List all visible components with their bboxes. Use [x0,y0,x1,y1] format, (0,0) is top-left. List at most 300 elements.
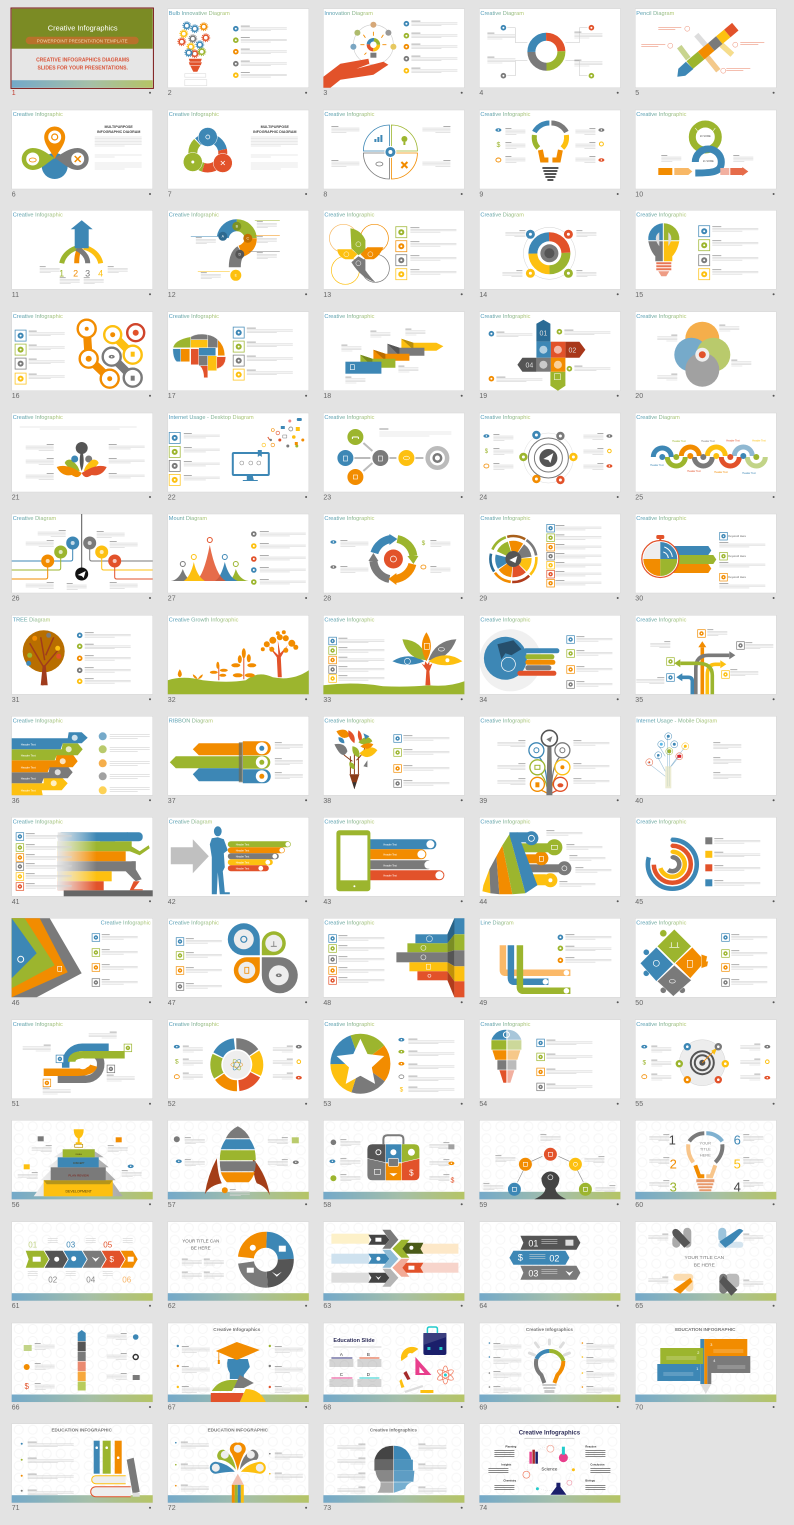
slide 7: multipurpose ring [168,110,309,198]
slide 42: businessman bands: Header Text [236,855,250,858]
slide 28: arrow cycle: 28 [323,596,331,602]
slide 10: figure eight arrows [635,110,776,198]
slide 55: target: Creative Infographic [636,1022,687,1028]
slide 49: line diagram: 49 [479,1000,487,1007]
slide 33: leaves infographic [323,615,464,704]
slide 30: stopwatch [635,514,776,602]
slide 20: venn: 20 [635,393,643,400]
slide 52: six-part ring: $ [175,1059,179,1066]
slide 44: fan stripes: Creative Infographic [480,819,531,825]
slide 68: education slide [323,1323,464,1412]
slide 45: concentric arcs: Creative Infographic [636,819,687,825]
slide 12: question mark: Creative Infographic [169,213,219,219]
slide 47: four teardrops [168,918,309,1007]
slide 48: 3d bars: Creative Infographic [324,920,375,926]
slide 62: title and ring arrows: 62 [168,1303,176,1310]
slide 70: education panels: EDUCATION INFOGRAPHIC [675,1327,736,1332]
slide 61: chevron steps: 04 [86,1276,96,1285]
slide 2: bulb innovative diagram: 2 [168,90,172,97]
slide 16: connected rings [12,312,153,400]
slide 11: arrow merge 1234: 1 [59,268,64,278]
slide 43: phone bands: Header Text [383,864,397,867]
slide 64: ribbon stack: $ [518,1253,523,1263]
slide 9: bulb with side icons [479,110,620,198]
slide 22: internet usage desktop [168,413,309,502]
slide 61: chevron steps: 03 [66,1241,76,1250]
slide 38: pencil tree: 38 [323,798,331,805]
slide 66: hexagon column: $ [24,1382,29,1391]
slide 22: internet usage desktop: Internet Usage - Desktop Diagram [169,415,254,421]
slide 18: stepped bands: Creative Infographic [324,314,375,320]
slide 61: chevron steps: 05 [103,1241,113,1250]
slide 32: growth infographic: 32 [168,697,176,704]
slide 64: ribbon stack: 01 [528,1239,538,1249]
slide 25: wave: Header Text [752,440,766,442]
slide 45: concentric arcs: 45 [635,899,643,906]
slide 61: chevron steps: 02 [48,1276,58,1285]
slide 56: stairs and trophy [12,1120,153,1209]
slide 12: question mark: A [222,235,225,239]
slide 6: multipurpose infographic: 6 [12,192,16,198]
slide 26: subway lines [12,514,153,602]
slide 72: pencil petals [168,1424,309,1512]
slide 39: pin tree: 39 [479,798,487,805]
slide 1: title slide: Creative Infographics [48,24,118,33]
slide 74: science: Creative Infographics [519,1431,581,1437]
slide 21: plant pins [12,413,153,502]
slide 36: stacked arrow bands: 36 [12,798,20,805]
slide 73: head profile: 73 [323,1505,331,1512]
slide 65: corner arrows with title: 65 [635,1303,643,1310]
slide 16: connected rings: 16 [12,393,20,400]
slide 40: internet usage mobile: 40 [635,798,643,805]
slide 25: wave: Header Text [742,472,756,475]
slide 2: bulb innovative diagram [168,9,309,97]
slide 5: pencil diagram: 5 [635,90,639,97]
slide 5: pencil diagram [635,9,776,97]
slide 30: stopwatch: Keyword Here [728,534,746,538]
slide 26: subway lines: Creative Diagram [13,516,57,522]
slide 62: title and ring arrows [168,1222,309,1310]
slide 6: multipurpose infographic: INFOGRAPHIC DIAGRAM [97,130,140,134]
slide 29: wheel: 29 [479,596,487,602]
slide 29: wheel [479,514,620,602]
slide 43: phone bands [323,817,464,906]
slide 72: pencil petals: 72 [168,1505,176,1512]
slide 25: wave [635,413,776,502]
slide 10: figure eight arrows: 21 SOME [703,160,714,163]
slide 42: businessman bands: Creative Diagram [169,819,213,825]
slide 36: stacked arrow bands: Creative Infographic [13,718,63,724]
slide 36: stacked arrow bands: Header Text [21,765,36,769]
slide 68: education slide: D [367,1372,371,1377]
slide 58: briefcase [323,1120,464,1209]
slide 2: bulb innovative diagram: Bulb Innovative Diagram [169,11,230,17]
slide 65: corner arrows with title: BE HERE [694,1263,715,1269]
slide 30: stopwatch: Keyword Here [728,554,746,558]
slide 27: mountain diagram [168,514,309,602]
slide 34: globe bands: 34 [479,697,487,704]
slide 58: briefcase: 58 [323,1202,331,1209]
slide 32: growth infographic: Creative Growth Infographic [169,617,239,623]
slide 57: rocket [168,1120,309,1209]
slide 73: head profile: Creative Infographics [370,1428,417,1433]
slide 47: four teardrops: 47 [168,1000,176,1007]
slide 15: bulb quadrants: 15 [635,292,643,299]
slide 11: arrow merge 1234 [12,210,153,299]
slide 22: internet usage desktop: 22 [168,494,176,502]
slide 7: multipurpose ring: Creative Infographic [169,112,219,118]
slide 17: brain: Creative Infographic [169,314,219,320]
slide 14: puzzle ring diagram [479,210,620,299]
slide 64: ribbon stack [479,1222,620,1310]
slide 56: stairs and trophy: PLAN REVIEW [68,1173,89,1177]
slide 19: cross arrows [479,312,620,400]
slide 12: question mark: D [239,253,242,257]
slide 1: title slide: CREATIVE INFOGRAPHICS DIAGRAMS [36,58,130,64]
slide 68: education slide: C [340,1372,344,1377]
slide 6: multipurpose infographic: Creative Infographic [13,112,63,118]
slide 31: tree diagram: 31 [12,697,20,704]
slide 6: multipurpose infographic: MULTIPURPOSE [105,125,133,129]
slide 7: multipurpose ring: 7 [168,192,172,198]
slide 69: bulb with rays: 69 [479,1404,487,1412]
slide 43: phone bands: Creative Infographic [324,819,375,825]
slide 30: stopwatch: Creative Infographic [636,516,687,522]
slide 53: star ring: $ [400,1087,404,1094]
slide 68: education slide: Education Slide [333,1338,375,1344]
slide 33: leaves infographic: Creative Infographic [324,617,375,623]
slide 19: cross arrows: 02 [569,348,576,355]
slide 16: connected rings: Creative Infographic [13,314,63,320]
slide 33: leaves infographic: 33 [323,697,331,704]
slide 32: growth infographic [168,615,309,704]
slide 39: pin tree [479,716,620,805]
slide 13: clover: Creative Infographic [324,213,375,219]
slide 67: graduate: Creative Infographics [213,1327,261,1332]
slide 34: globe bands [479,615,620,704]
slide 15: bulb quadrants: Creative Infographic [636,213,687,219]
slide 3: innovation diagram: Innovation Diagram [324,11,373,17]
slide 74: science: Chemistry [503,1479,517,1483]
slide 12: question mark: C [247,237,250,241]
slide 37: ribbon diagram: 37 [168,798,176,805]
slide 68: education slide: A [340,1352,343,1357]
slide 12: question mark: E [235,274,238,278]
slide 60: numbered bulb: TITLE [700,1146,711,1151]
slide 50: puzzle [635,918,776,1007]
slide 74: science: Planning [505,1445,517,1449]
slide 28: arrow cycle [323,514,464,602]
slide 53: star ring: 53 [323,1101,331,1108]
slide 19: cross arrows: Creative Infographic [480,314,531,320]
slide 46: chevron corner [12,918,153,1007]
slide 20: venn: Creative Infographic [636,314,687,320]
slide 25: wave: Creative Diagram [636,415,680,421]
slide 70: education panels: 1 [696,1367,698,1371]
slide 48: 3d bars [323,918,464,1007]
slide 71: books: EDUCATION INFOGRAPHIC [51,1428,113,1433]
slide 70: education panels [635,1323,776,1412]
slide 19: cross arrows: 19 [479,393,487,400]
slide 4: creative diagram ring: Creative Diagram [480,11,524,17]
slide 28: arrow cycle: Creative Infographic [324,516,375,522]
slide 74: science: Reaction [585,1445,597,1449]
slide 30: stopwatch: Keyword Here [728,575,746,579]
slide 42: businessman bands: 42 [168,899,176,906]
slide 36: stacked arrow bands [12,716,153,805]
slide 23: flow circles: Creative Infographic [324,415,375,421]
slide 12: question mark: B [236,225,239,229]
slide 43: phone bands: Header Text [383,843,397,846]
slide 38: pencil tree [323,716,464,805]
slide 8: quadrant circle: Creative Infographic [324,112,375,118]
slide 60: numbered bulb: 4 [734,1179,741,1194]
slide 34: globe bands: Creative Infographic [480,617,531,623]
slide 25: wave: Header Text [687,470,701,473]
slide 69: bulb with rays [479,1323,620,1412]
slide 68: education slide: 68 [323,1404,331,1412]
slide 67: graduate [168,1323,309,1412]
slide 52: six-part ring [168,1020,309,1108]
slide 43: phone bands: Header Text [383,853,397,856]
slide 66: hexagon column: 66 [12,1404,20,1412]
slide 1: title slide: SLIDES FOR YOUR PRESENTATIONS. [38,66,128,72]
slide 39: pin tree: Creative Infographic [480,718,531,724]
slide 18: stepped bands [323,312,464,400]
slide 12: question mark: 12 [168,292,176,299]
slide 74: science: Biology [585,1479,595,1483]
slide 74: science: 74 [479,1505,487,1512]
slide 56: stairs and trophy: IDEAS [75,1153,83,1156]
slide 59: head with network: 59 [479,1202,487,1209]
slide 23: flow circles: 23 [323,494,331,502]
slide 66: hexagon column [12,1323,153,1412]
slide 10: figure eight arrows: 10 [635,192,643,198]
slide 40: internet usage mobile [635,716,776,805]
slide 70: education panels: 70 [635,1404,643,1412]
slide 21: plant pins: 21 [12,494,20,502]
slide 59: head with network [479,1120,620,1209]
slide 42: businessman bands: Header Text [236,867,250,870]
slide 62: title and ring arrows: BE HERE [191,1246,211,1251]
slide 4: creative diagram ring [479,9,620,97]
slide 3: innovation diagram: 3 [323,90,327,97]
slide 57: rocket: 57 [168,1202,176,1209]
slide 40: internet usage mobile: Internet Usage - Mobile Diagram [636,718,717,724]
slide 71: books [12,1424,153,1512]
slide 13: clover [323,210,464,299]
slide 52: six-part ring: 52 [168,1101,176,1108]
slide 46: chevron corner: Creative Infographic [101,920,151,926]
slide 61: chevron steps [12,1222,153,1310]
slide 20: venn [635,312,776,400]
slide 26: subway lines: 26 [12,596,20,602]
slide 36: stacked arrow bands: Header Text [21,776,36,780]
slide 11: arrow merge 1234: 3 [85,268,90,278]
slide 27: mountain diagram: Mount Diagram [169,516,207,522]
slide 41: runner [12,817,153,906]
slide 35: road arrows: Creative Infographic [636,617,687,623]
slide 10: figure eight arrows: Creative Infographic [636,112,687,118]
slide 28: arrow cycle: $ [422,540,426,547]
slide 53: star ring [323,1020,464,1108]
slide 60: numbered bulb: 5 [734,1156,741,1171]
slide 70: education panels: 3 [710,1343,712,1347]
slide 1: title slide: POWERPOINT PRESENTATION TEMPLATE [37,38,128,43]
slide 25: wave: Header Text [701,440,715,443]
slide 55: target: $ [642,1060,646,1067]
slide 11: arrow merge 1234: 4 [98,268,103,278]
slide 35: road arrows: 35 [635,697,643,704]
slide 74: science: Science [541,1467,558,1472]
slide 9: bulb with side icons: Creative Infographic [480,112,531,118]
slide 35: road arrows [635,615,776,704]
slide 19: cross arrows: 04 [526,363,533,370]
slide 11: arrow merge 1234: Creative Infographic [13,213,63,219]
slide 21: plant pins: Creative Infographic [13,415,63,421]
slide 64: ribbon stack: 64 [479,1303,487,1310]
slide 30: stopwatch: 30 [635,596,643,602]
slide 44: fan stripes [479,817,620,906]
slide 1: title slide: 1 [12,90,16,97]
slide 67: graduate: 67 [168,1404,176,1412]
slide 71: books: 71 [12,1505,20,1512]
slide 55: target: 55 [635,1101,643,1108]
slide 47: four teardrops: Creative Infographic [169,920,219,926]
slide 54: striped bulb [479,1020,620,1108]
slide 37: ribbon diagram: RIBBON Diagram [169,718,213,724]
slide 6: multipurpose infographic [12,110,153,198]
slide 43: phone bands: Header Text [383,874,397,877]
slide 17: brain [168,312,309,400]
slide 24: paper plane radial: 24 [479,494,487,502]
slide 53: star ring: Creative Infographic [324,1022,375,1028]
slide 3: innovation diagram [323,9,464,97]
slide 25: wave: Header Text [650,464,664,467]
slide 61: chevron steps: 61 [12,1303,20,1310]
slide 42: businessman bands: Header Text [236,849,250,852]
slide 69: bulb with rays: Creative Infographics [526,1327,573,1332]
slide 27: mountain diagram: 27 [168,596,176,602]
slide 24: paper plane radial: $ [485,449,489,455]
slide 56: stairs and trophy: DEVELOPMENT [65,1189,93,1193]
slide 1: title slide [11,8,153,97]
slide 49: line diagram: Line Diagram [480,920,514,926]
slide 11: arrow merge 1234: 2 [73,268,78,278]
slide 15: bulb quadrants [635,210,776,299]
slide 55: target [635,1020,776,1108]
slide 5: pencil diagram: Pencil Diagram [636,11,675,17]
slide 54: striped bulb: Creative Infographic [480,1022,531,1028]
slide 58: briefcase: $ [409,1168,414,1177]
slide 36: stacked arrow bands: Header Text [21,742,36,746]
slide 37: ribbon diagram [168,716,309,805]
slide 62: title and ring arrows: YOUR TITLE CAN [182,1239,219,1244]
slide 7: multipurpose ring: MULTIPURPOSE [261,125,290,129]
slide 73: head profile [323,1424,464,1512]
slide 74: science: Conclusion [590,1463,605,1467]
slide 51: interlocked bands: 51 [12,1101,20,1108]
slide 25: wave: Header Text [726,440,740,442]
slide 68: education slide: B [367,1352,370,1357]
slide 13: clover: 13 [323,292,331,299]
slide 42: businessman bands: Header Text [236,843,250,846]
slide 43: phone bands: 43 [323,899,331,906]
slide 17: brain: 17 [168,393,176,400]
slide 63: arrow rows: 63 [323,1303,331,1310]
slide 61: chevron steps: 06 [122,1276,132,1285]
slide 44: fan stripes: 44 [479,899,487,906]
slide 60: numbered bulb: YOUR [700,1140,711,1145]
slide 25: wave: Header Text [672,440,686,443]
slide 60: numbered bulb: 2 [670,1156,677,1171]
slide 49: line diagram [479,918,620,1007]
slide 64: ribbon stack: 02 [549,1254,559,1264]
slide 60: numbered bulb: 1 [669,1132,676,1147]
slide 50: puzzle: Creative Infographic [636,920,687,926]
slide 70: education panels: 2 [697,1351,699,1355]
slide 36: stacked arrow bands: Header Text [21,753,36,757]
slide 65: corner arrows with title: YOUR TITLE CAN [684,1255,725,1261]
slide 14: puzzle ring diagram: Creative Diagram [480,213,524,219]
slide 8: quadrant circle [323,110,464,198]
slide 63: arrow rows [323,1222,464,1310]
slide 45: concentric arcs [635,817,776,906]
slide 72: pencil petals: EDUCATION INFOGRAPHIC [208,1428,269,1433]
slide 60: numbered bulb [635,1120,776,1209]
slide 25: wave: Header Text [714,471,728,474]
slide 29: wheel: Creative Infographic [480,516,531,522]
slide 4: creative diagram ring: 4 [479,90,483,97]
slide 46: chevron corner: 46 [12,1000,20,1007]
slide 12: question mark [168,210,309,299]
slide 9: bulb with side icons: 9 [479,192,483,198]
slide 60: numbered bulb: 6 [734,1132,741,1147]
slide 31: tree diagram: TREE Diagram [13,617,51,623]
slide 64: ribbon stack: 03 [528,1269,538,1279]
slide 56: stairs and trophy: CONCEPT [73,1162,85,1165]
slide 25: wave: 25 [635,494,643,502]
slide 7: multipurpose ring: INFOGRAPHIC DIAGRAM [253,130,296,134]
slide 70: education panels: 4 [713,1359,715,1363]
slide 9: bulb with side icons: $ [496,142,500,149]
slide 61: chevron steps: $ [109,1255,114,1264]
slide 36: stacked arrow bands: Header Text [21,788,36,792]
slide 51: interlocked bands: Creative Infographic [13,1022,63,1028]
slide 60: numbered bulb: 3 [670,1179,677,1194]
slide 24: paper plane radial: Creative Infographic [480,415,531,421]
slide 14: puzzle ring diagram: 14 [479,292,487,299]
slide 50: puzzle: 50 [635,1000,643,1007]
slide 23: flow circles [323,413,464,502]
slide 19: cross arrows: 01 [540,331,547,338]
slide 74: science [479,1424,620,1512]
slide 24: paper plane radial [479,413,620,502]
slide 8: quadrant circle: 8 [323,192,327,198]
slide 41: runner: 41 [12,899,20,906]
slide 31: tree diagram [12,615,153,704]
slide 65: corner arrows with title [635,1222,776,1310]
slide 52: six-part ring: Creative Infographic [169,1022,219,1028]
slide 10: figure eight arrows: 20 SOME [700,135,711,138]
slide 56: stairs and trophy: 56 [12,1202,20,1209]
slide 48: 3d bars: 48 [323,1000,331,1007]
slide 42: businessman bands: Header Text [236,861,250,864]
slide 60: numbered bulb: 60 [635,1202,643,1209]
slide 74: science: Insights [501,1463,512,1467]
slide 41: runner: Creative Infographic [13,819,63,825]
